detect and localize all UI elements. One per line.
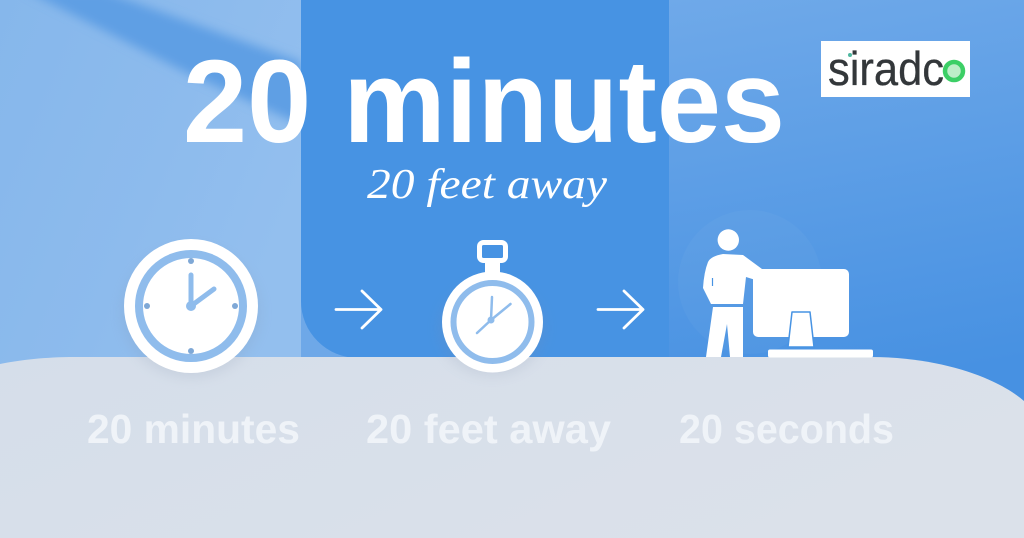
panel: right background bbox=[669, 0, 1024, 410]
label: 20 feet away: 20 feet away bbox=[366, 406, 611, 452]
label: 20 seconds: 20 seconds bbox=[679, 406, 894, 452]
arrow 2 bbox=[598, 291, 643, 328]
title: 20 minutes bbox=[183, 36, 785, 168]
icon: clock bbox=[121, 239, 261, 378]
monitor bbox=[753, 269, 849, 337]
pocket slit bbox=[712, 278, 714, 286]
halo behind person bbox=[678, 210, 822, 354]
person head bbox=[718, 229, 739, 251]
person legs bbox=[706, 307, 743, 357]
panel: bottom grey area bbox=[0, 357, 1024, 538]
logo: siradc bbox=[828, 42, 944, 95]
decorative diagonal band bbox=[25, 0, 301, 125]
label: 20 minutes: 20 minutes bbox=[87, 406, 300, 452]
arrow 1 bbox=[336, 291, 381, 328]
monitor stand bbox=[788, 312, 814, 347]
person body bbox=[703, 254, 762, 304]
panel: left background bbox=[0, 0, 301, 370]
panel: centre blue column bbox=[301, 0, 669, 358]
icon: stopwatch bbox=[438, 242, 546, 376]
icon: person at monitor bbox=[703, 229, 873, 358]
monitor base bbox=[768, 350, 873, 358]
subtitle: 20 feet away bbox=[367, 162, 607, 208]
